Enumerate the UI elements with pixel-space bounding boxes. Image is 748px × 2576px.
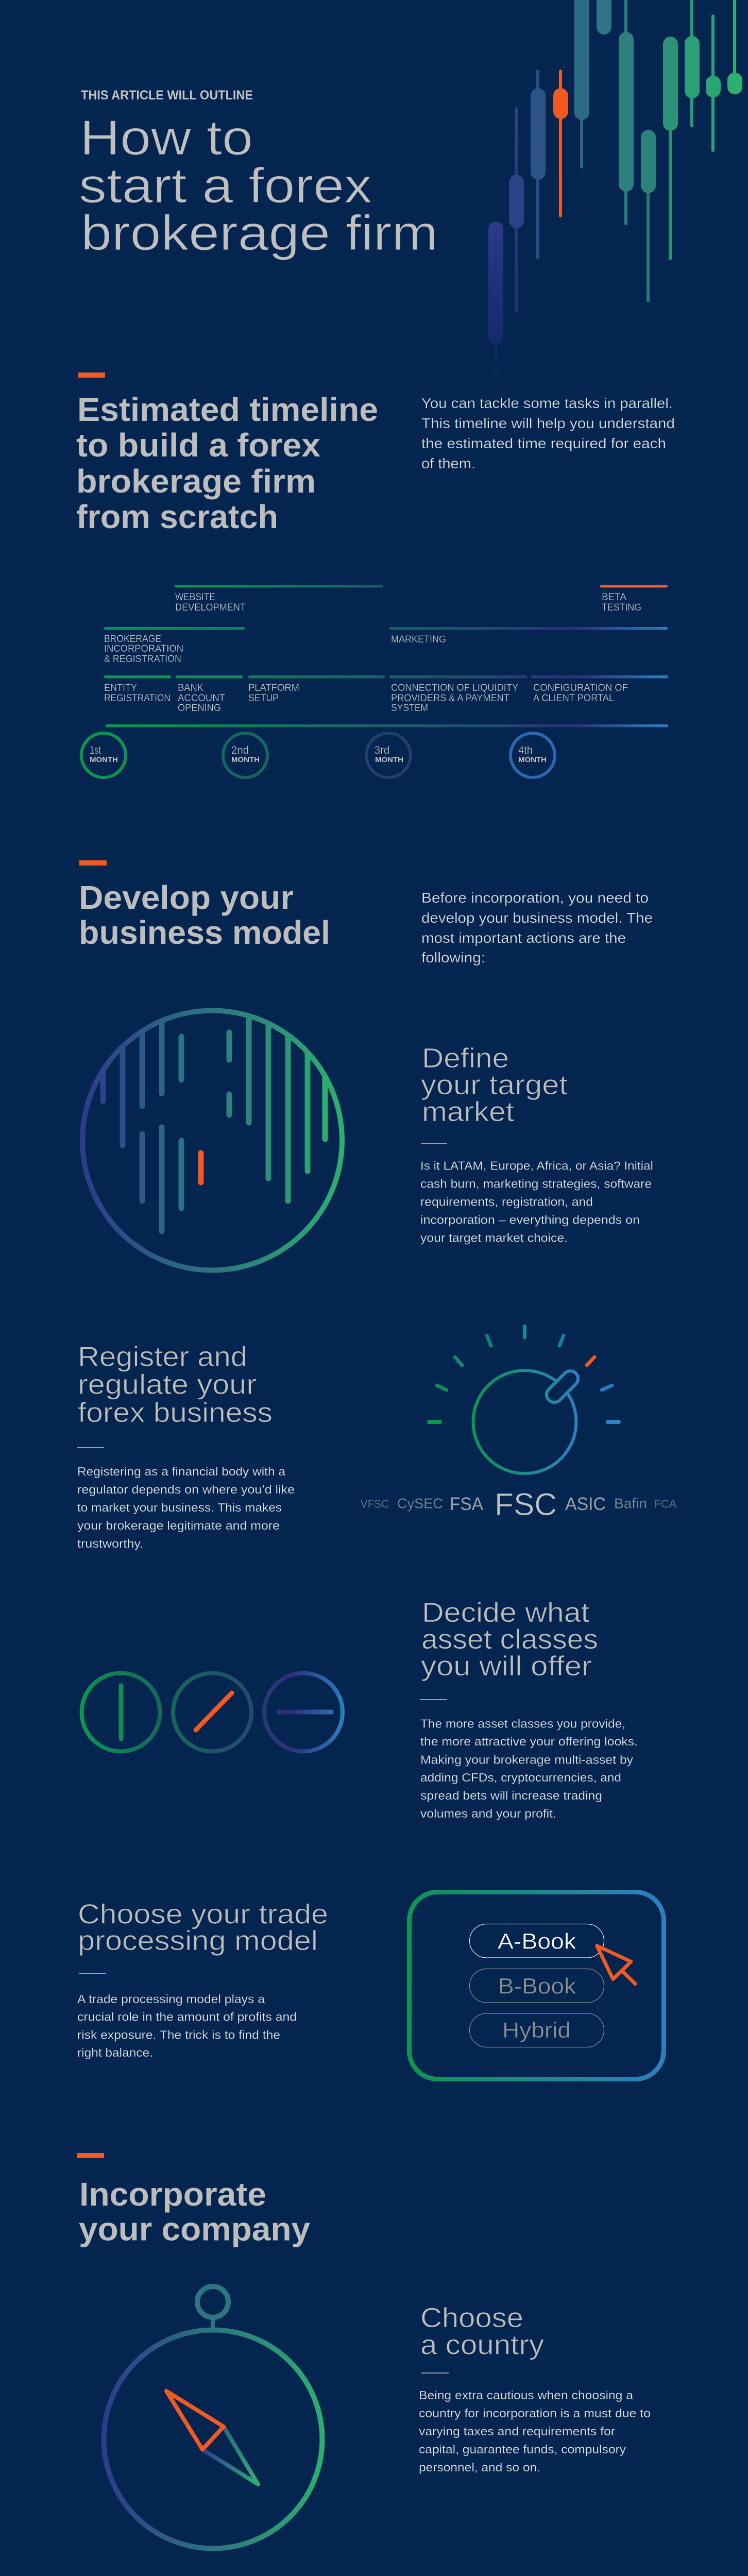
month marker: 4th: 4th [518, 744, 533, 756]
month marker: 4th [511, 733, 555, 777]
subheading: a country [420, 2330, 544, 2361]
icon: compass [104, 2286, 322, 2548]
body text: your brokerage legitimate and more [77, 1519, 280, 1532]
body text [77, 1465, 295, 1550]
task: configuration of client portal: CONFIGURATION OF [533, 683, 628, 693]
block: choose your trade processing model [77, 1899, 328, 2059]
eyebrow: this article will outline: THIS ARTICLE WILL OUTLINE [81, 88, 253, 103]
subheading: Decide what [422, 1597, 589, 1628]
subheading: you will offer [421, 1651, 592, 1682]
task: brokerage incorporation [104, 627, 245, 665]
body text: adding CFDs, cryptocurrencies, and [420, 1771, 621, 1784]
subheading: asset classes [421, 1624, 598, 1655]
body text: Is it LATAM, Europe, Africa, or Asia? Initial [420, 1159, 653, 1173]
regulator names: FSC [495, 1487, 557, 1522]
task: website development: WEBSITE [175, 592, 215, 603]
task: bank account opening: BANK [178, 683, 203, 693]
body text: the more attractive your offering looks. [420, 1735, 638, 1748]
panel: A-Book B-Book Hybrid [409, 1892, 664, 2079]
task: entity registration [104, 675, 171, 704]
task: platform setup [248, 675, 385, 704]
body text: Being extra cautious when choosing a [419, 2388, 633, 2402]
subheading: regulate your [78, 1369, 257, 1400]
subheading: processing model [78, 1925, 318, 1956]
task: brokerage incorporation: & REGISTRATION [104, 654, 181, 665]
regulator names: CySEC [397, 1495, 443, 1512]
body text: varying taxes and requirements for [419, 2425, 615, 2438]
block: register and regulate [77, 1342, 295, 1550]
subheading [78, 1899, 328, 1956]
intro text [421, 890, 653, 965]
option: B-Book: B-Book [498, 1974, 576, 1998]
body text: cash burn, marketing strategies, software [420, 1177, 652, 1190]
intro text: following: [421, 950, 485, 965]
body text: Making your brokerage multi-asset by [420, 1753, 634, 1766]
subheading: forex business [78, 1397, 273, 1428]
task: platform setup: PLATFORM [248, 683, 299, 693]
task: beta testing: TESTING [602, 602, 641, 613]
task: marketing: MARKETING [391, 634, 446, 645]
task: entity registration: REGISTRATION [104, 693, 171, 704]
icon: globe [82, 1011, 342, 1270]
intro text: You can tackle some tasks in parallel. [421, 395, 673, 411]
month marker: 2nd: MONTH [231, 755, 260, 764]
intro text [421, 395, 675, 471]
heading [79, 879, 330, 951]
rule [77, 1447, 104, 1448]
task: bank account opening [176, 675, 243, 714]
heading: Estimated timeline [77, 391, 378, 428]
heading: from scratch [76, 498, 278, 535]
chart: project timeline [81, 585, 668, 777]
intro text: develop your business model. The [421, 910, 653, 926]
month marker: 3rd [366, 733, 411, 777]
subheading [421, 1043, 568, 1127]
body text [420, 1717, 638, 1820]
orange accent [78, 372, 105, 378]
body text: country for incorporation is a must due to [419, 2406, 651, 2420]
option: Hybrid: Hybrid [502, 2018, 571, 2043]
month marker: 2nd: 2nd [231, 744, 249, 756]
subheading [420, 2302, 544, 2361]
body text: spread bets will increase trading [420, 1789, 602, 1802]
task: marketing [389, 627, 668, 645]
title: How to [80, 110, 253, 165]
subheading [78, 1342, 273, 1428]
regulator names: ASIC [565, 1494, 606, 1514]
rule [420, 1699, 447, 1700]
body text [420, 1159, 653, 1245]
body text [77, 1992, 297, 2059]
task: brokerage incorporation: BROKERAGE [104, 634, 161, 645]
block: define your target market [420, 1043, 653, 1245]
body text: your target market choice. [420, 1231, 568, 1245]
subheading: Define [422, 1043, 509, 1074]
heading: Develop your [79, 879, 294, 916]
month marker: 1st: MONTH [90, 755, 118, 764]
body text: right balance. [77, 2046, 153, 2059]
section: develop your business model [79, 860, 653, 965]
option: A-Book: A-Book [498, 1929, 576, 1954]
task: connection of liquidity providers: SYSTEM [391, 703, 428, 714]
task: brokerage incorporation: INCORPORATION [104, 643, 183, 654]
task: configuration of client portal: A CLIENT PORTAL [533, 693, 614, 704]
body text: volumes and your profit. [420, 1807, 556, 1820]
orange accent [77, 2153, 104, 2158]
month marker: 2nd [223, 733, 267, 777]
icon: cursor [597, 1945, 635, 1984]
month marker: 3rd: 3rd [375, 744, 389, 756]
body text: crucial role in the amount of profits and [77, 2010, 297, 2024]
subheading [421, 1597, 598, 1682]
subheading: market [422, 1096, 514, 1127]
task: platform setup: SETUP [248, 693, 279, 704]
body text: Registering as a financial body with a [77, 1465, 285, 1478]
body text: The more asset classes you provide, [420, 1717, 625, 1730]
task: beta testing: BETA [602, 592, 626, 603]
rule [421, 1143, 447, 1144]
title: start a forex [79, 158, 372, 213]
icon: regulator dial [429, 1326, 619, 1473]
title: brokerage firm [81, 206, 438, 261]
task: connection of liquidity providers [389, 675, 527, 714]
task: beta testing [600, 585, 668, 613]
regulator names: VFSC [361, 1497, 389, 1511]
body text: trustworthy. [77, 1537, 143, 1550]
task: website development: DEVELOPMENT [175, 602, 246, 613]
option: B-Book [470, 1969, 604, 2003]
heading: your company [79, 2210, 310, 2247]
main timeline bar [106, 724, 668, 727]
body text: regulator depends on where you’d like [77, 1483, 295, 1496]
month marker: 1st [81, 733, 126, 777]
body text: requirements, registration, and [420, 1195, 593, 1209]
block: choose a country [419, 2302, 651, 2474]
body text [419, 2388, 651, 2474]
heading: business model [79, 914, 330, 951]
icon: three asset dials [81, 1673, 343, 1752]
body text: personnel, and so on. [419, 2461, 540, 2474]
rule [79, 1973, 106, 1974]
subheading: Register and [78, 1342, 247, 1372]
option: Hybrid [470, 2013, 604, 2047]
subheading: Choose [420, 2302, 523, 2333]
rule [421, 2372, 449, 2374]
month marker: 3rd: MONTH [375, 755, 403, 764]
regulator names [361, 1487, 676, 1522]
regulator names: Bafin [614, 1495, 647, 1512]
section: estimated timeline [76, 372, 675, 535]
regulator names: FCA [654, 1497, 676, 1511]
month marker: 1st: 1st [90, 744, 101, 756]
option: A-Book [470, 1924, 604, 1958]
task: entity registration: ENTITY [104, 683, 137, 693]
heading: brokerage firm [76, 463, 316, 500]
chart: decorative candlesticks [488, 0, 742, 379]
heading [79, 2176, 310, 2247]
subheading: Choose your trade [78, 1899, 328, 1930]
body text: capital, guarantee funds, compulsory [419, 2443, 626, 2456]
section: incorporate your company [77, 2153, 310, 2247]
regulator names: FSA [450, 1494, 484, 1514]
task: connection of liquidity providers: CONNECTION OF LIQUIDITY [391, 683, 518, 693]
task: website development [175, 585, 383, 613]
intro text: This timeline will help you understand [421, 415, 675, 431]
heading: Incorporate [79, 2176, 266, 2213]
intro text: the estimated time required for each [421, 435, 666, 451]
title [79, 110, 438, 261]
body text: to market your business. This makes [77, 1501, 282, 1514]
task: connection of liquidity providers: PROVIDERS & A PAYMENT [391, 693, 509, 704]
body text: A trade processing model plays a [77, 1992, 265, 2006]
body text: incorporation – everything depends on [420, 1213, 640, 1226]
intro text: Before incorporation, you need to [421, 890, 649, 906]
subheading: your target [421, 1070, 568, 1100]
intro text: most important actions are the [421, 930, 626, 946]
intro text: of them. [421, 455, 475, 471]
task: configuration of client portal [531, 675, 668, 704]
block: decide what asset classes [420, 1597, 638, 1820]
orange accent [79, 860, 107, 866]
heading [76, 391, 378, 535]
task: bank account opening: OPENING [178, 703, 221, 714]
month marker: 4th: MONTH [518, 755, 547, 764]
heading: to build a forex [76, 427, 320, 464]
task: bank account opening: ACCOUNT [178, 693, 225, 704]
body text: risk exposure. The trick is to find the [77, 2028, 280, 2041]
